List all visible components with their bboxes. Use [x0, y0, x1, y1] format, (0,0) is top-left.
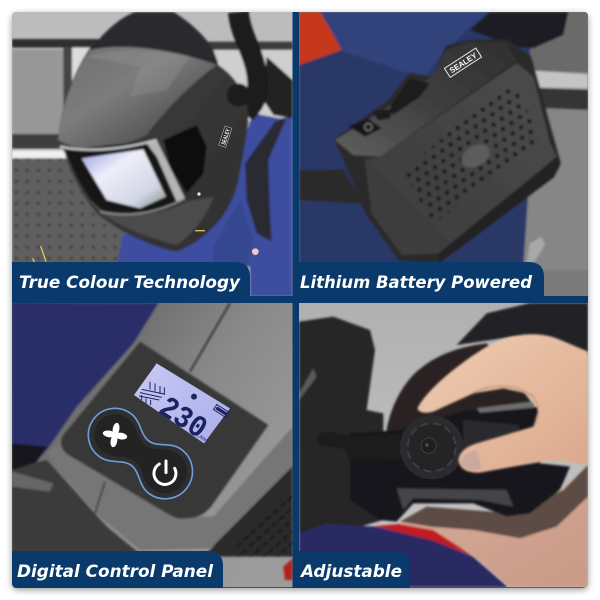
strap arm — [317, 432, 400, 461]
neck — [400, 467, 588, 587]
helmet brand badge — [219, 126, 233, 148]
fabric — [12, 303, 158, 470]
LCD display: L/Min — [196, 433, 209, 443]
photo: welding helmet — [12, 12, 293, 302]
panel: adjustable — [299, 303, 589, 590]
photo: battery unit on belt — [299, 12, 589, 302]
collar and jacket — [299, 524, 508, 587]
label bar: True Colour Technology — [19, 273, 241, 293]
panel: lithium battery powered — [299, 12, 589, 302]
label bar — [12, 551, 223, 588]
label bar: Digital Control Panel — [17, 562, 214, 582]
mini controls — [348, 118, 382, 137]
backpack strap — [245, 117, 287, 242]
visor — [58, 47, 217, 149]
hood left — [299, 317, 383, 533]
control face — [61, 342, 268, 519]
grey cloth — [12, 460, 143, 557]
glove — [470, 12, 568, 48]
battery brand badge: SEALEY — [448, 51, 479, 75]
chin band — [90, 197, 213, 245]
photo: hand adjusting headband knob — [299, 303, 589, 590]
adjuster knob — [400, 415, 464, 479]
sparks — [33, 231, 205, 263]
label bar — [299, 551, 410, 588]
label bar: Adjustable — [299, 562, 402, 582]
hood — [88, 12, 218, 63]
label bar — [12, 262, 250, 297]
device lower rim — [47, 427, 293, 550]
LCD display — [134, 363, 230, 447]
hood top — [457, 303, 588, 353]
panel: digital control panel — [12, 303, 293, 590]
jacket — [117, 113, 293, 297]
button pill — [87, 408, 194, 500]
icon: power — [154, 461, 176, 484]
icon: fan — [102, 422, 128, 448]
helmet shell — [62, 48, 250, 253]
photo: control panel close-up — [12, 303, 293, 590]
glove / hood behind hose — [263, 57, 293, 118]
belt — [299, 169, 363, 204]
hair — [385, 342, 538, 432]
dark vented flank — [200, 467, 293, 557]
device body — [335, 41, 560, 262]
jacket — [299, 12, 530, 267]
LCD display: 230 — [152, 391, 213, 447]
hose — [238, 12, 258, 113]
headband — [350, 407, 570, 522]
nape hair — [400, 465, 588, 538]
window — [65, 140, 186, 213]
helmet brand badge: SEALEY — [221, 128, 232, 146]
label bar — [299, 262, 544, 297]
side opening — [163, 125, 207, 193]
hand — [417, 334, 588, 473]
panel: true colour technology — [12, 12, 293, 302]
label bar: Lithium Battery Powered — [300, 273, 533, 293]
